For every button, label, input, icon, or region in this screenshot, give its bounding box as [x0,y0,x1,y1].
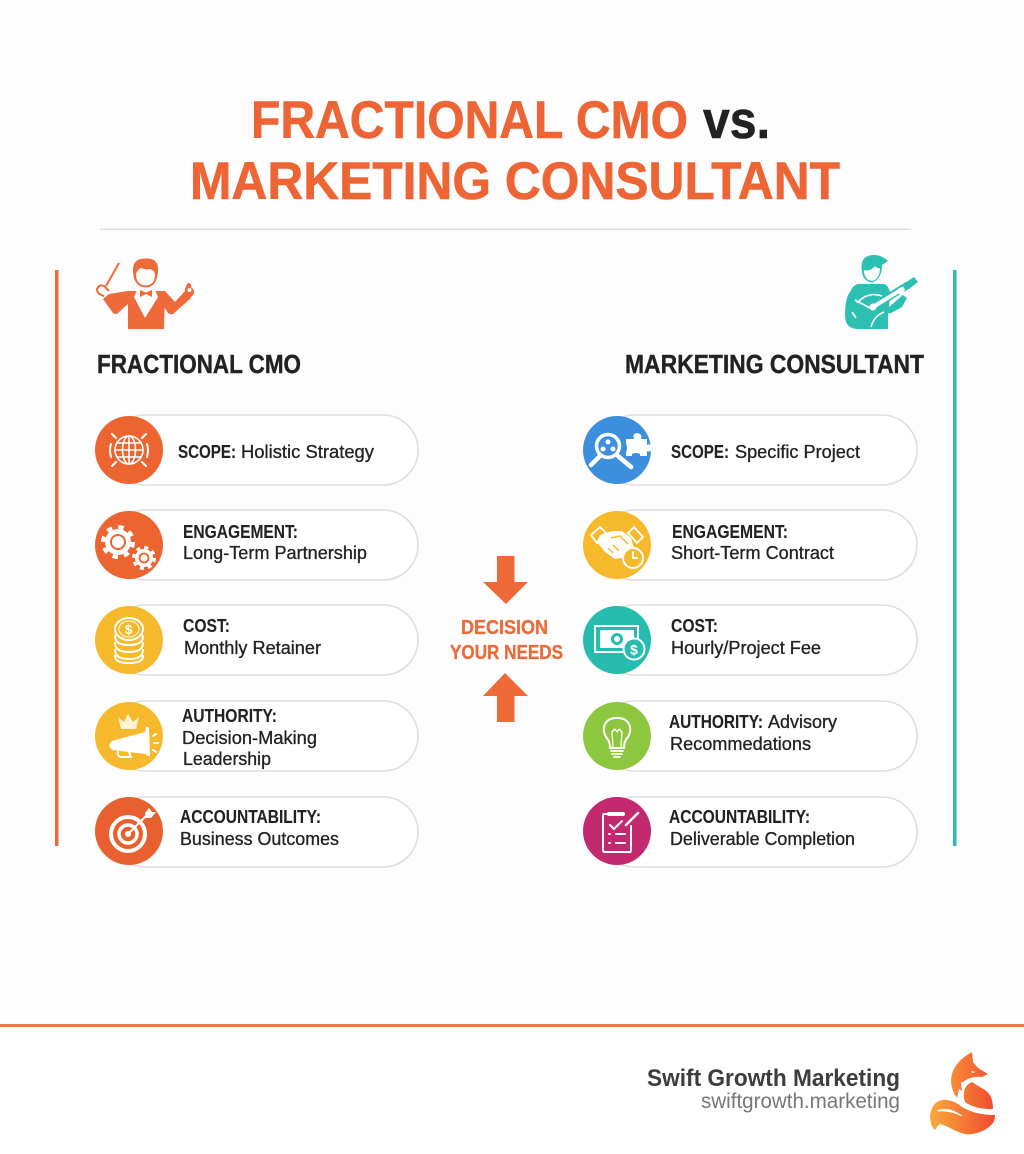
text: authority [182,706,317,769]
text: authority: Advisory [768,712,837,732]
text: scope [671,442,860,462]
brand name: Swift Growth Marketing [647,1065,900,1092]
text: authority: Leadership [183,749,271,769]
row: scope [583,415,917,485]
heading: fractional CMO: FRACTIONAL CMO [97,349,301,379]
text: authority [669,712,837,754]
icon: target [111,808,156,851]
title: vs. [703,91,770,150]
title [190,91,840,211]
row: authority [583,701,917,771]
title: FRACTIONAL CMO [251,91,688,150]
panel: marketing consultant [583,255,956,867]
row: cost [583,605,917,675]
icon: coins [115,618,143,663]
text: cost: COST: [671,616,718,636]
icon: guitarist [845,255,918,329]
text: engagement [671,522,834,563]
text: authority: AUTHORITY: [182,706,277,726]
row: accountability [583,797,917,867]
row: accountability [95,797,418,867]
decision text: YOUR NEEDS [450,642,563,664]
left accent bar [55,270,58,846]
text: scope [178,442,374,462]
text: accountability: Business Outcomes [180,829,339,849]
icon: cash and coin: $ [630,642,638,658]
text: accountability: ACCOUNTABILITY: [669,807,810,827]
title: MARKETING CONSULTANT [190,152,840,211]
footer band [0,1024,1024,1154]
row: scope [95,415,418,485]
row: engagement [95,510,418,580]
icon: crown and megaphone [110,714,158,757]
text: accountability: Deliverable Completion [670,829,855,849]
text: authority: AUTHORITY: [669,712,763,732]
row: authority [95,701,418,771]
icon: magnifier and puzzle [591,433,652,467]
text: scope: SCOPE: [178,442,236,462]
text: scope: SCOPE: [671,442,729,462]
text: engagement: Short-Term Contract [671,543,834,563]
text: cost: Hourly/Project Fee [671,638,821,658]
text: accountability: ACCOUNTABILITY: [180,807,321,827]
icon: clipboard [603,813,638,852]
text: cost [183,616,321,658]
center decision marker [450,556,563,722]
text: cost: Monthly Retainer [184,638,321,658]
heading: marketing consultant: MARKETING CONSULTANT [625,349,924,379]
text: accountability [180,807,339,849]
text: cost [671,616,821,658]
text: authority: Decision-Making [182,728,317,748]
text: scope: Holistic Strategy [241,442,374,462]
text: engagement [183,522,367,563]
icon: globe [110,434,148,466]
text: engagement: ENGAGEMENT: [672,522,788,542]
text: authority: Recommedations [670,734,811,754]
icon: conductor [97,258,194,329]
icon: light bulb [604,718,630,757]
text: engagement: Long-Term Partnership [183,543,367,563]
brand url: swiftgrowth.marketing [701,1090,900,1113]
icon: handshake and clock [591,527,643,568]
text: accountability [669,807,855,849]
arrow: down [483,556,528,604]
icon: gears [103,527,154,568]
decision text: DECISION [461,617,548,639]
text: scope: Specific Project [735,442,860,462]
text: cost: COST: [183,616,230,636]
text: engagement: ENGAGEMENT: [183,522,298,542]
panel: fractional CMO [55,258,418,867]
icon: fox logo [930,1052,995,1134]
icon: coins: $ [125,622,133,637]
arrow: up [483,673,528,722]
decision text [450,617,563,664]
right accent bar [953,270,956,846]
row: engagement [583,510,917,580]
icon: cash and coin [595,626,644,660]
row: cost [95,605,418,675]
